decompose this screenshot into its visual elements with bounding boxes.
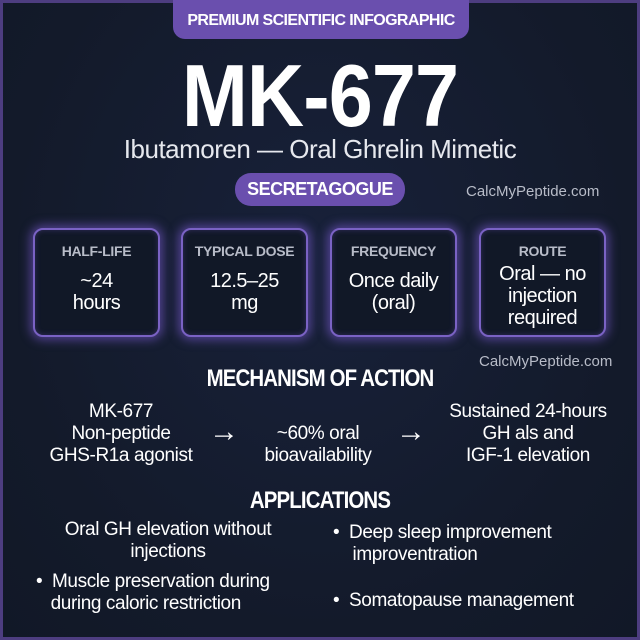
application 1: injections: [130, 541, 206, 562]
card: typical dose: TYPICAL DOSE: [195, 243, 294, 259]
card: route: required: [508, 307, 577, 329]
arrow 2: →: [396, 415, 426, 448]
application 2: [36, 571, 270, 614]
mechanism step 2: bioavailability: [264, 445, 372, 466]
application 4: • Somatopause management: [333, 590, 574, 611]
mechanism step 3: [449, 401, 607, 466]
category pill: [235, 173, 405, 206]
application 1: Oral GH elevation without: [65, 519, 271, 540]
card: frequency: FREQUENCY: [351, 243, 436, 259]
card: half-life: hours: [73, 292, 120, 314]
card: route: Oral — no: [499, 263, 586, 285]
category pill: SECRETAGOGUE: [247, 179, 393, 199]
top pill: premium label: PREMIUM SCIENTIFIC INFOGRAPHIC: [187, 12, 455, 29]
mechanism step 3: Sustained 24-hours: [449, 401, 607, 422]
card: frequency: [330, 228, 457, 337]
top pill: premium label: [173, 0, 469, 39]
card: half-life: ~24: [80, 270, 113, 292]
mechanism step 2: [264, 423, 372, 466]
mechanism step 1: MK-677: [89, 401, 153, 422]
mechanism step 3: GH als and: [482, 423, 574, 444]
card: route: [479, 228, 606, 337]
subtitle: Ibutamoren — Oral Ghrelin Mimetic: [124, 134, 516, 164]
heading: mechanism: MECHANISM OF ACTION: [207, 365, 433, 392]
application 2: during caloric restriction: [51, 593, 241, 614]
card: half-life: [33, 228, 160, 337]
arrow 1: →: [209, 415, 239, 448]
card: typical dose: 12.5–25: [210, 270, 279, 292]
card: typical dose: [181, 228, 308, 337]
mechanism step 1: Non-peptide: [71, 423, 171, 444]
mechanism step 3: IGF-1 elevation: [466, 445, 590, 466]
card: half-life: HALF-LIFE: [62, 243, 131, 259]
card: frequency: (oral): [372, 292, 415, 314]
watermark 2: CalcMyPeptide.com: [479, 353, 612, 370]
card: route: ROUTE: [519, 243, 566, 259]
application 3: • Deep sleep improvement: [333, 522, 551, 543]
mechanism step 1: GHS-R1a agonist: [50, 445, 192, 466]
application 2: • Muscle preservation during: [36, 571, 270, 592]
title: MK-677: [182, 46, 458, 145]
watermark 1: CalcMyPeptide.com: [466, 183, 599, 200]
card: route: injection: [508, 285, 577, 307]
application 3: [333, 522, 552, 565]
heading: applications: APPLICATIONS: [250, 487, 390, 514]
application 1: [65, 519, 272, 562]
card: typical dose: mg: [231, 292, 258, 314]
card: frequency: Once daily: [349, 270, 438, 292]
mechanism step 2: ~60% oral: [277, 423, 359, 444]
mechanism step 1: [50, 401, 193, 466]
application 3: improventration: [352, 544, 477, 565]
